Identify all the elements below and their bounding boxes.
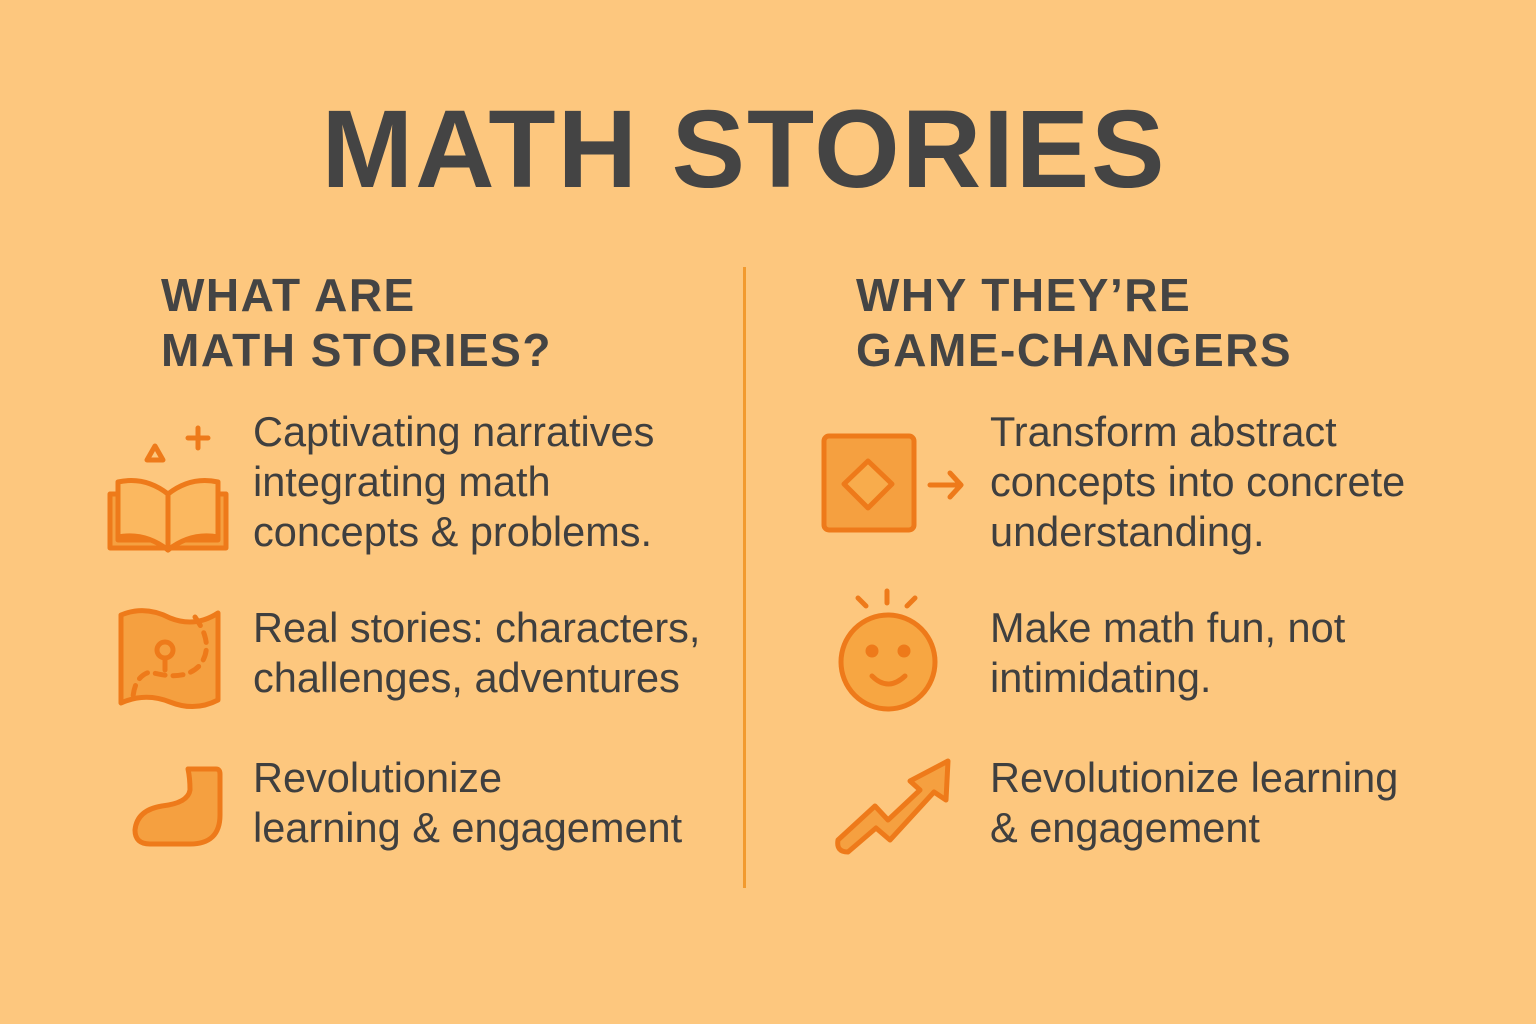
text: transform abstract <box>990 408 1405 555</box>
icon: treasure map <box>121 611 218 707</box>
text: revolutionize learning right: & engagement <box>990 804 1260 851</box>
icon: j-shaped curve <box>135 769 220 844</box>
text: real stories <box>253 604 700 701</box>
text: transform abstract: understanding. <box>990 508 1265 555</box>
text: captivating narratives: integrating math <box>253 458 551 505</box>
heading: what are math stories: WHAT ARE <box>161 269 416 321</box>
text: revolutionize learning left: learning & engagement <box>253 804 682 851</box>
text: captivating narratives <box>253 408 654 555</box>
text: make math fun <box>990 604 1345 701</box>
text: revolutionize learning left <box>253 754 682 851</box>
text: captivating narratives: Captivating narratives <box>253 408 654 455</box>
text: revolutionize learning right: Revolutionize learning <box>990 754 1398 801</box>
icon: square with diamond and arrow <box>824 436 961 530</box>
heading: why they're game-changers <box>856 269 1292 376</box>
text: revolutionize learning left: Revolutionize <box>253 754 502 801</box>
icon: trending up arrow <box>838 761 948 852</box>
heading: why they're game-changers: WHY THEY’RE <box>856 269 1191 321</box>
text: revolutionize learning right <box>990 754 1398 851</box>
heading: why they're game-changers: GAME-CHANGERS <box>856 324 1292 376</box>
text: real stories: challenges, adventures <box>253 654 680 701</box>
text: transform abstract: Transform abstract <box>990 408 1337 455</box>
icon: book with math symbols <box>110 428 226 550</box>
divider <box>743 267 746 888</box>
text: make math fun: Make math fun, not <box>990 604 1345 651</box>
heading: what are math stories: MATH STORIES? <box>161 324 552 376</box>
text: captivating narratives: concepts & problems. <box>253 508 652 555</box>
text: real stories: Real stories: characters, <box>253 604 700 651</box>
heading: what are math stories <box>161 269 552 376</box>
icon: smiley face <box>841 591 935 709</box>
text: make math fun: intimidating. <box>990 654 1211 701</box>
title: MATH STORIES <box>322 88 1166 211</box>
text: transform abstract: concepts into concrete <box>990 458 1405 505</box>
